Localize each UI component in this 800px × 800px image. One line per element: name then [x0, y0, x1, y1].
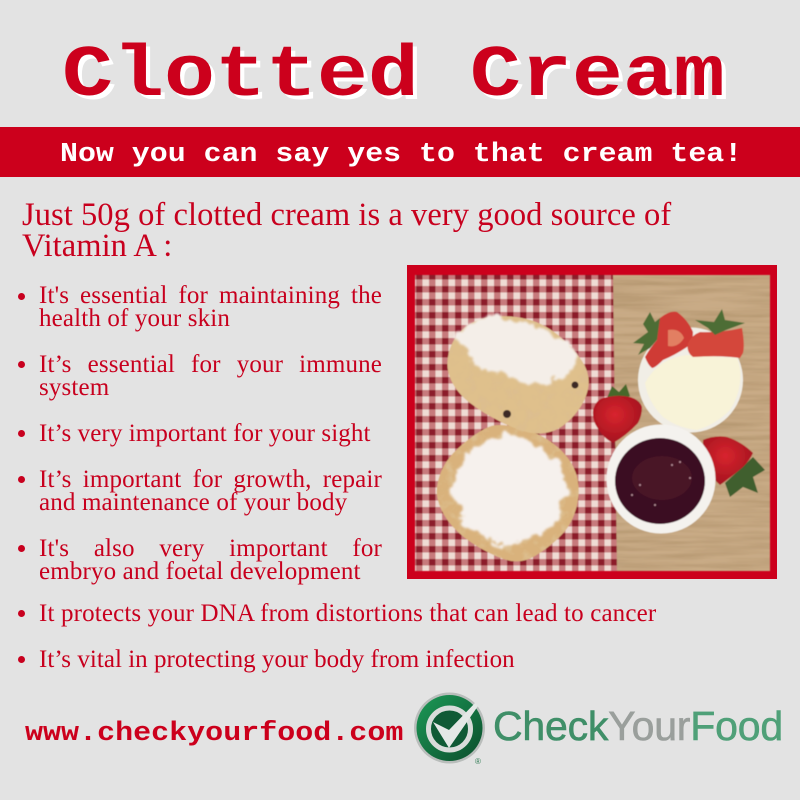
- photo contents: [415, 275, 770, 571]
- bullet: skin: [39, 282, 382, 332]
- banner text: Now you can say yes to that cream tea!: [60, 140, 742, 170]
- bullet: DNA: It protects your DNA from distortions that can lead to cancer: [39, 600, 656, 627]
- strawberry: right: [703, 436, 765, 497]
- cream bowl: [638, 328, 743, 432]
- bullet: growth: and maintenance of your body: [39, 489, 347, 516]
- bullet: skin: health of your skin: [39, 305, 230, 332]
- title: Clotted Cream: [62, 35, 725, 117]
- website url: www.checkyourfood.com: [25, 719, 403, 749]
- bullet: embryo: [39, 535, 382, 585]
- bullet: embryo: embryo and foetal development: [39, 558, 361, 585]
- gingham cloth: [415, 275, 617, 571]
- intro heading: [22, 197, 672, 264]
- bullet: embryo: It's also very important for: [39, 535, 382, 562]
- intro heading: Just 50g of clotted cream is a very good source of: [22, 197, 671, 233]
- icon: check mark badge: ®: [475, 757, 481, 766]
- bullet: immune system: It’s essential for your immune: [39, 351, 382, 378]
- bullet: growth: It’s important for growth, repair: [39, 466, 382, 493]
- bullet: immune system: system: [39, 374, 109, 401]
- photo frame: [407, 265, 777, 579]
- bullet list: [18, 282, 656, 673]
- logo wordmark: CheckYourFood: [493, 703, 783, 749]
- banner: [0, 127, 800, 177]
- upper scone: [447, 307, 589, 434]
- lower scone: [437, 425, 579, 561]
- logo: [414, 692, 783, 766]
- bullet: immune system: [39, 351, 382, 401]
- jam bowl: [606, 424, 716, 534]
- intro heading: Vitamin A :: [22, 228, 172, 264]
- bullet: infection: It’s vital in protecting your body from infection: [39, 646, 515, 673]
- wood board: [415, 275, 770, 571]
- strawberry: middle: [593, 384, 642, 443]
- bullet: growth: [39, 466, 382, 516]
- icon: check mark badge: [414, 692, 485, 766]
- strawberry halves: [633, 309, 745, 368]
- bullet: skin: It's essential for maintaining the: [39, 282, 382, 309]
- bullet: sight: It’s very important for your sight: [39, 420, 370, 447]
